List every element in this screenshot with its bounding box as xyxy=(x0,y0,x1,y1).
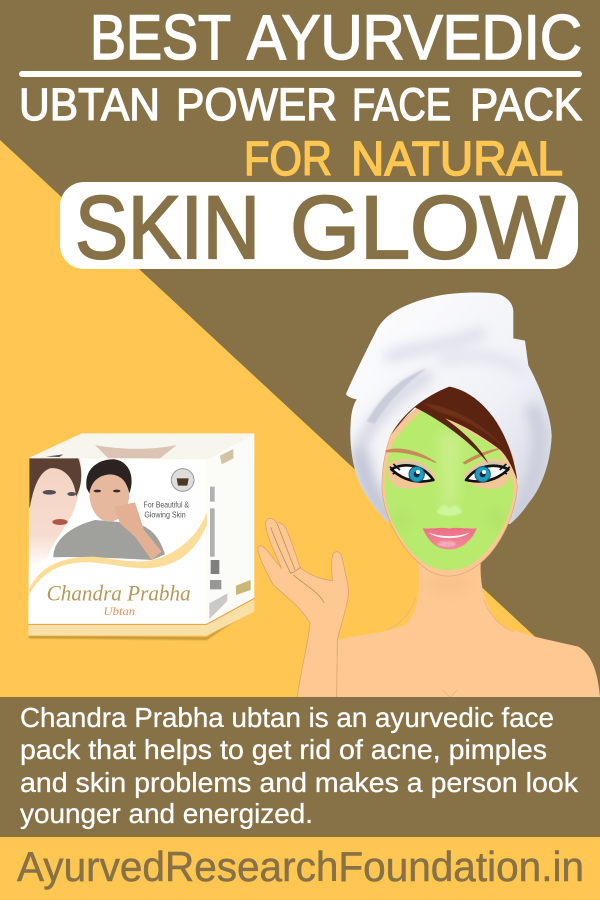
raised hand and arm xyxy=(258,518,348,697)
box tagline line two: Glowing Skin xyxy=(144,511,186,520)
neck shadow xyxy=(426,572,472,595)
green face mask xyxy=(385,409,514,570)
nose xyxy=(437,505,462,516)
title: ubtan power face pack: FACE xyxy=(352,79,451,130)
title: for natural xyxy=(244,133,563,186)
shoulders and chest xyxy=(337,563,600,697)
box logo xyxy=(171,469,194,491)
description line one: Chandra Prabha ubtan is an ayurvedic face xyxy=(20,702,554,733)
box brand name: Chandra Prabha xyxy=(47,580,191,605)
eye patch left xyxy=(387,459,437,489)
towel folds xyxy=(360,333,539,520)
box front xyxy=(28,458,207,624)
skin glow text: GLOW xyxy=(290,177,565,277)
title: ubtan power face pack xyxy=(19,79,582,130)
eyebrow right xyxy=(463,448,501,464)
description line two: pack that helps to get rid of acne, pimples xyxy=(20,734,547,765)
title: for natural: NATURAL xyxy=(351,133,563,186)
title: for natural: FOR xyxy=(244,133,332,186)
eyeshadow left xyxy=(393,461,434,475)
box tagline: For Beautiful & xyxy=(144,501,190,510)
box product name: Ubtan xyxy=(103,606,136,618)
eyeshadow right xyxy=(466,461,507,475)
hair xyxy=(392,387,517,480)
title: ubtan power face pack: PACK xyxy=(470,79,582,130)
skin glow text: SKIN xyxy=(75,177,260,277)
footer website: AyurvedResearchFoundation.in xyxy=(17,843,584,890)
description line three: and skin problems and makes a person look xyxy=(20,767,579,798)
hair fringe strand xyxy=(423,403,507,450)
box base xyxy=(28,598,254,636)
skin glow text xyxy=(75,177,565,277)
box front photo: man xyxy=(53,459,165,560)
box swoosh xyxy=(29,512,207,595)
eyebrow left xyxy=(386,449,436,463)
title: best ayurvedic xyxy=(90,3,582,73)
box side xyxy=(207,433,254,624)
description line four: younger and energized. xyxy=(20,798,313,829)
eye left xyxy=(390,464,433,482)
box side details xyxy=(209,449,251,619)
eye patch right xyxy=(463,459,513,489)
box front photo: woman xyxy=(29,458,81,568)
towel xyxy=(346,293,552,524)
yellow diagonal panel xyxy=(0,140,600,697)
eye right xyxy=(466,464,510,482)
box shadow xyxy=(29,607,257,640)
face skin xyxy=(382,388,517,576)
divider rule xyxy=(19,71,582,77)
title: best ayurvedic: AYURVEDIC xyxy=(247,3,582,73)
title: best ayurvedic: BEST xyxy=(90,3,231,73)
woman illustration xyxy=(258,293,600,697)
title: ubtan power face pack: POWER xyxy=(176,79,337,130)
lips xyxy=(423,528,477,549)
mask highlights xyxy=(436,430,465,507)
skin glow pill xyxy=(60,177,578,277)
description band xyxy=(0,697,600,837)
footer band xyxy=(0,837,600,900)
title: ubtan power face pack: UBTAN xyxy=(19,79,160,130)
box top xyxy=(29,433,254,459)
collarbone lines xyxy=(387,598,513,697)
product box xyxy=(28,433,257,640)
